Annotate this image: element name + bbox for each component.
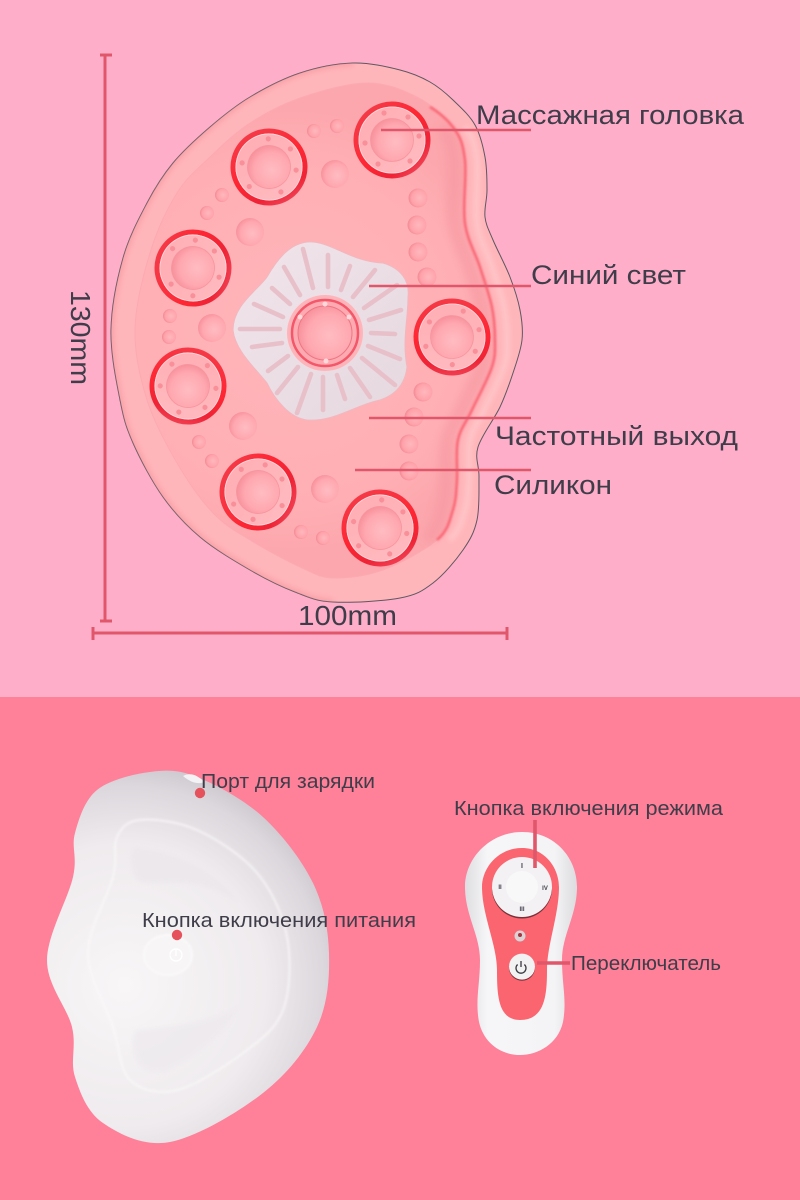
dimension: width: 100mm [298,600,397,631]
mode dial: III [519,907,525,913]
label: frequency output: Частотный выход [495,421,738,451]
rim edge shading [111,63,353,602]
marker: power button [172,930,182,940]
blue light flower panel [233,242,408,420]
label: massage head: Массажная головка [476,100,745,130]
small dots [162,119,436,545]
label: charging port: Порт для зарядки [201,771,375,793]
body outline [111,63,522,602]
leader line: blue light [369,285,531,287]
label: switch: Переключатель [571,953,721,975]
power button [509,954,535,981]
top background panel [0,0,800,697]
back shell [47,771,329,1143]
label: mode button: Кнопка включения режима [454,798,724,820]
upper recess [131,848,240,903]
power icon [170,949,182,961]
remote coral panel [482,848,559,1020]
mode dial [492,857,552,918]
remote body [465,832,577,1055]
centre massage head [287,295,363,371]
leader line: switch [537,961,570,965]
horizontal dimension line [93,627,507,640]
massage heads [139,104,503,574]
massager front view [111,63,522,602]
leader line: massage head [381,129,531,131]
leader line: frequency output [369,417,531,419]
rim highlight on right [449,127,507,540]
label: silicone: Силикон [494,470,612,500]
charging port notch [183,774,204,783]
dimension: height: 130mm [65,290,96,385]
silicone face [135,83,495,578]
face ridge [430,107,495,540]
face shadow near right ridge [426,127,484,540]
mode dial: IV [542,886,548,892]
remote control [465,832,577,1055]
massager back view [47,771,329,1143]
label: blue light: Синий свет [531,260,686,290]
vertical dimension line [100,55,112,621]
mode dial: I [521,863,523,870]
power button recess [144,935,192,975]
shell ridge [88,820,290,1092]
indicator jewel [514,930,526,942]
leader line: mode button [533,820,537,868]
bottom background panel [0,697,800,1200]
label: power button: Кнопка включения питания [142,910,416,932]
large bumps [198,160,349,503]
flower spokes [240,249,401,413]
marker: charging port [195,788,205,798]
leader line: silicone [355,469,531,471]
lower recess [133,1005,240,1072]
mode dial: II [498,885,502,891]
